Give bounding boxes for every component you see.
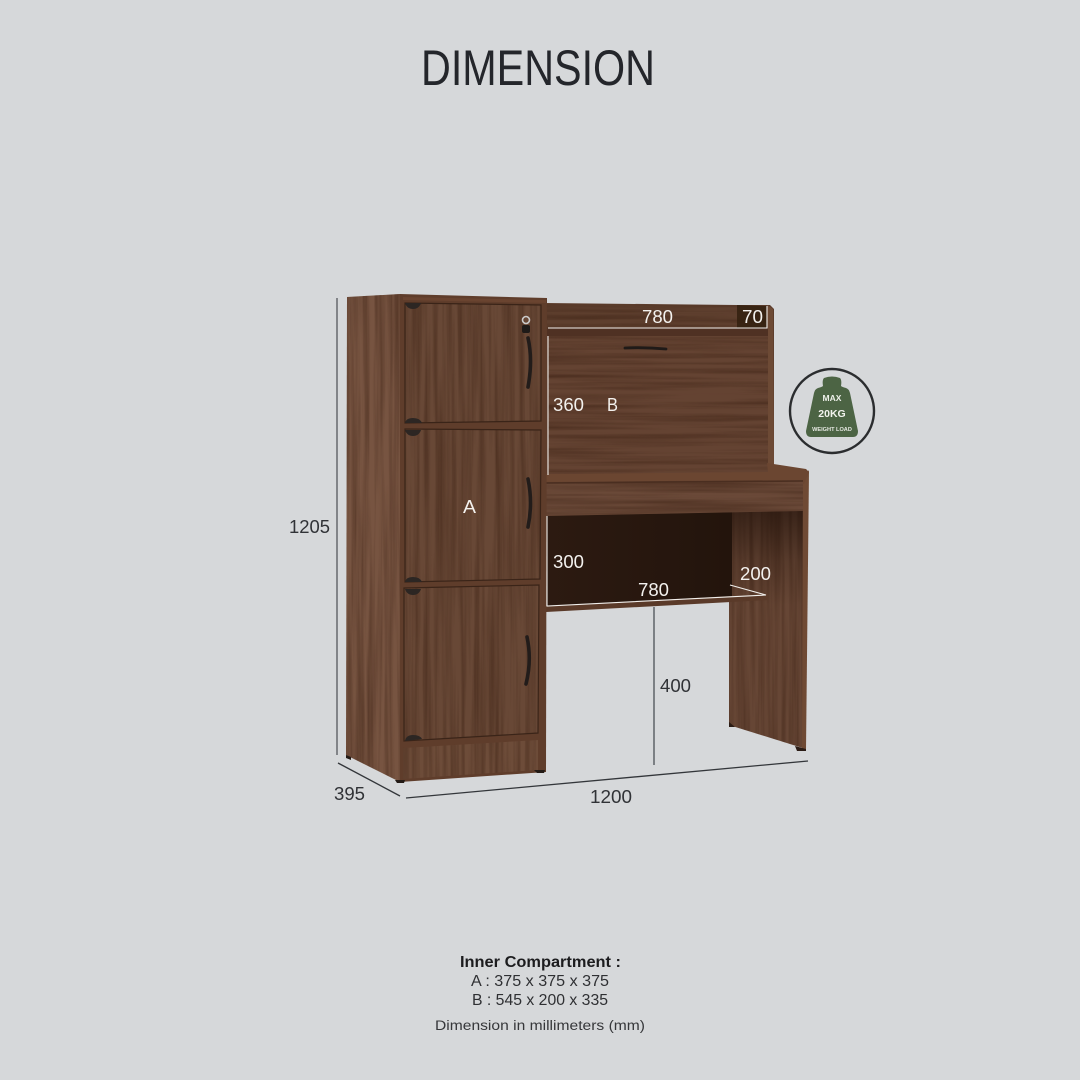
desk top and front — [546, 463, 809, 516]
dimension labels: outside: 395 — [334, 784, 365, 804]
door 2 — [405, 429, 541, 582]
inner compartment note: A : 375 x 375 x 375 — [471, 973, 609, 990]
dimension labels: on furniture: 780 — [642, 307, 673, 327]
dimension labels: on furniture: B — [607, 395, 618, 415]
door 1 — [405, 303, 541, 423]
weight load badge: MAX — [823, 393, 842, 403]
weight load badge: 20KG — [818, 408, 846, 420]
dimension labels: on furniture: 780 — [638, 580, 669, 600]
dimension labels: outside — [289, 517, 691, 807]
door 3 — [404, 585, 539, 741]
inner compartment note — [435, 954, 645, 1033]
inner compartment note: B : 545 x 200 x 335 — [472, 992, 608, 1009]
cabinet side panel — [346, 294, 400, 782]
desk leg — [729, 470, 809, 751]
dimension labels: outside: 400 — [660, 676, 691, 696]
lock and key — [522, 316, 530, 333]
dimension labels: on furniture: 70 — [742, 307, 763, 327]
weight load badge — [790, 369, 874, 453]
dimension labels: on furniture: 360 — [553, 395, 584, 415]
dimension labels: on furniture: 300 — [553, 552, 584, 572]
cabinet feet — [346, 755, 545, 783]
inner compartment note: Dimension in millimeters (mm) — [435, 1018, 645, 1033]
title: DIMENSION — [421, 40, 655, 96]
plinth — [403, 740, 538, 779]
desk cavity — [546, 508, 768, 612]
dimension labels: outside: 1205 — [289, 517, 330, 537]
cabinet doors — [403, 303, 541, 779]
door handles — [526, 338, 530, 684]
desk hutch — [546, 303, 774, 480]
flip door B — [548, 336, 768, 475]
dimension labels: outside: 1200 — [590, 787, 632, 807]
icon: weight — [806, 376, 858, 437]
dimension labels: on furniture: 200 — [740, 564, 771, 584]
inner compartment note: Inner Compartment : — [460, 954, 621, 971]
cabinet front frame — [400, 294, 547, 782]
dimension labels: on furniture: A — [463, 497, 476, 517]
white measure lines inside furniture — [547, 306, 767, 606]
door outlines — [404, 303, 541, 741]
dimension labels: on furniture — [463, 307, 771, 600]
weight load badge: WEIGHT LOAD — [812, 427, 852, 433]
dimension lines outside furniture — [337, 298, 808, 798]
furniture: cabinet and desk — [346, 294, 809, 783]
hinges — [405, 303, 422, 741]
